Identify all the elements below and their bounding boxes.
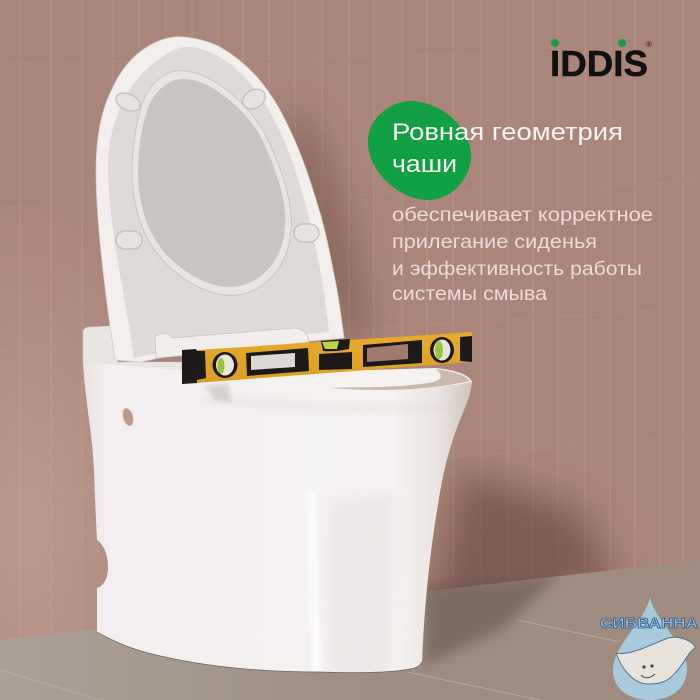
left vial bbox=[212, 352, 238, 378]
logo: IDDIS: ® bbox=[646, 40, 652, 49]
base contact line bbox=[97, 632, 422, 673]
right vial bbox=[430, 337, 454, 363]
lid recess bbox=[138, 79, 285, 287]
heading: чаши bbox=[392, 151, 457, 178]
description text: обеспечивает корректное bbox=[392, 204, 653, 226]
rim shade line bbox=[200, 398, 462, 410]
background: floor bbox=[0, 560, 700, 700]
glossy highlight band bbox=[309, 493, 320, 672]
green blob accent bbox=[368, 101, 471, 200]
bowl inner shade bbox=[330, 369, 470, 390]
shadow on floor bbox=[425, 575, 560, 665]
description text bbox=[392, 204, 653, 305]
toilet bowl body bbox=[83, 326, 472, 680]
right end cap bbox=[460, 336, 472, 362]
bumper lower right bbox=[294, 224, 319, 242]
description text: прилегание сиденья bbox=[392, 231, 597, 253]
soft reflection band bbox=[338, 505, 386, 672]
cistern base bbox=[83, 326, 182, 373]
bath face bbox=[641, 664, 655, 678]
raised toilet seat bbox=[96, 37, 344, 362]
left window bbox=[246, 348, 309, 376]
hinge bar bbox=[155, 328, 309, 358]
heading: Ровная геометрия bbox=[392, 119, 623, 146]
seat inner face bbox=[108, 47, 329, 358]
level shadow on ceramic bbox=[205, 384, 232, 402]
logo: IDDIS: IDDIS bbox=[550, 43, 648, 84]
description text: системы смыва bbox=[392, 283, 547, 305]
right window bbox=[363, 340, 422, 367]
ring bbox=[132, 71, 291, 295]
shadow cast by toilet on wall bbox=[430, 470, 620, 610]
seat outer shell bbox=[96, 37, 344, 362]
bowl opening bbox=[247, 368, 472, 390]
bath bbox=[616, 637, 695, 684]
left end cap bbox=[182, 349, 206, 384]
top vial bbox=[321, 339, 350, 351]
shadow cast by seat on wall bbox=[285, 110, 366, 345]
side hole bbox=[121, 407, 135, 427]
level body bbox=[182, 332, 472, 384]
spirit level bbox=[182, 332, 472, 384]
bumper top right bbox=[239, 85, 269, 113]
bumper lower left bbox=[116, 231, 142, 249]
glossy shading on body bbox=[309, 493, 386, 672]
center black panel bbox=[319, 352, 352, 370]
ceramic body bbox=[83, 362, 472, 673]
watermark name: СИБВАННА bbox=[600, 615, 698, 632]
drop bbox=[613, 597, 687, 700]
watermark: Sibvanna bbox=[600, 597, 698, 700]
bumper top left bbox=[113, 89, 143, 115]
description text: и эффективность работы bbox=[392, 258, 642, 280]
heading bbox=[392, 119, 623, 178]
